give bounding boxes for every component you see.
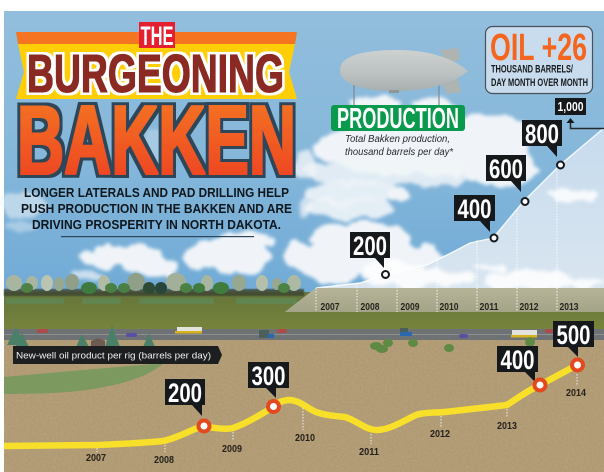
production caption: Total Bakken production, [345,134,450,145]
1,000 label with arrow: 1,000 [558,100,584,114]
production caption [345,134,454,158]
production heading: PRODUCTION [337,103,459,135]
word: BAKKEN: BAKKEN [17,85,296,195]
subtitle: LONGER LATERALS AND PAD DRILLING HELP [24,185,289,200]
marker: 300 rig: 300 [252,361,286,391]
marker: 200 production: 200 [353,231,387,261]
production year markers [316,168,557,312]
1,000 label with arrow [555,98,604,128]
production year labels: 2009 [400,301,420,313]
cloud reflections [365,189,600,291]
x-axis band [285,288,604,312]
green patch [4,363,164,394]
marker: 300 rig [248,361,289,412]
marker: 800: 800 [525,119,559,149]
year labels: 2010 [295,432,315,444]
marker: 500 rig: 500 [556,320,590,350]
new-well label: New-well oil product per rig (barrels per day) [16,350,211,362]
subtitle: PUSH PRODUCTION IN THE BAKKEN AND ARE [21,201,292,216]
year labels: 2007 [86,452,106,464]
road [4,329,604,340]
marker: 600 [486,154,528,205]
production year labels: 2008 [360,301,380,313]
marker: 200 rig: 200 [168,378,202,408]
production year labels [320,301,579,313]
year labels: 2008 [154,454,174,466]
marker: 600: 600 [489,154,523,184]
yellow trend line [4,365,577,446]
marker: 200 rig [165,378,210,432]
new-well line chart [4,365,586,466]
white curve edge [316,128,604,288]
production year labels: 2010 [440,301,459,313]
vehicles and roadside scenery [7,325,553,353]
title block [16,21,297,232]
production year labels: 2013 [560,301,579,313]
production area chart [285,128,604,313]
year labels: 2013 [497,420,517,432]
word: THE: THE [140,21,174,51]
production caption: thousand barrels per day* [345,147,454,158]
year labels: 2012 [430,428,450,440]
title banner [16,32,297,44]
sky background [4,11,604,301]
year tick marks [97,368,577,452]
word: THE [139,21,175,51]
production year labels: 2007 [320,301,340,313]
marker: 500 rig [553,320,594,370]
subtitle: DRIVING PROSPERITY IN NORTH DAKOTA. [32,217,281,232]
new-well label [13,346,222,364]
clouds [0,95,538,285]
icon: blimp [340,48,468,106]
marker: 200 production [350,231,390,278]
subtitle [21,185,292,232]
ground [4,340,604,472]
oil callout [486,26,592,94]
year labels: 2014 [566,387,586,399]
production heading [331,103,465,135]
area under production curve [285,128,604,312]
marker: 800 [522,119,564,168]
hillside grass [4,292,604,330]
marker: 400 production: 400 [458,194,492,224]
hedges [5,298,297,304]
production year labels: 2012 [520,301,539,313]
year labels: 2009 [222,443,242,455]
word: BURGEONING: BURGEONING [27,44,284,104]
tree line [4,273,304,296]
year labels: 2011 [359,446,379,458]
production year labels: 2011 [480,301,499,313]
marker: 400 rig: 400 [500,345,534,375]
marker: 400 production [454,194,498,242]
marker: 400 rig [497,345,546,390]
year labels [86,387,586,466]
